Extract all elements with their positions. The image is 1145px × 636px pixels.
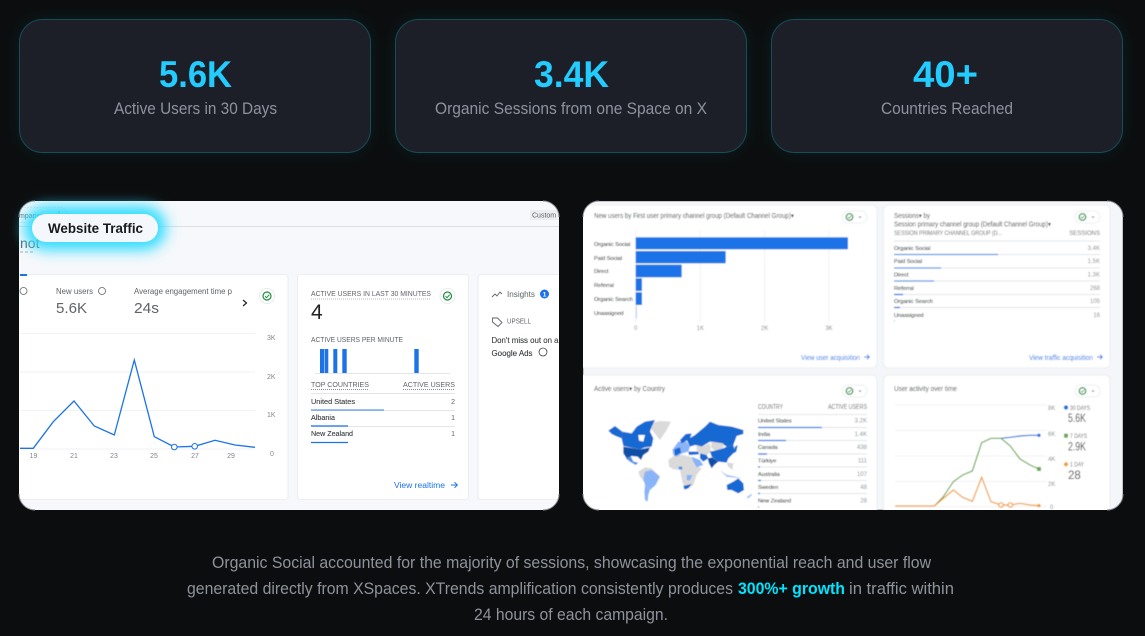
y axis labels: 1K	[267, 412, 276, 419]
legend: 30 days	[1064, 405, 1090, 425]
bar chart: channels	[636, 237, 848, 318]
panel: insights: UPSELL	[507, 318, 531, 326]
panel: insights: Insights	[507, 290, 535, 299]
table: top countries: TOP COUNTRIES	[311, 382, 369, 389]
table: top countries: United States	[311, 399, 356, 406]
icon: chevron right	[243, 300, 246, 306]
y axis labels: 2K	[1048, 482, 1055, 488]
table: top countries: ACTIVE USERS	[403, 382, 455, 389]
table: top countries: 1	[451, 431, 455, 438]
world map	[608, 420, 752, 502]
table: countries: Sweden	[758, 485, 778, 491]
panel: website traffic screenshot: not	[20, 235, 40, 251]
icon: verified check	[440, 288, 455, 304]
x axis labels: 21	[70, 453, 78, 460]
text block: summary: Organic Social accounted for the majority of sessions, showcasing the exponential reach and user flow	[212, 554, 931, 572]
panel: active users by country	[583, 374, 878, 510]
y axis labels: 8K	[1048, 406, 1055, 412]
table: countries: Canada	[758, 445, 778, 451]
table: sessions: Paid Social	[894, 259, 922, 265]
icon: verified check	[260, 288, 274, 304]
panel: insights	[478, 274, 559, 500]
x axis labels	[30, 453, 235, 458]
badge: website traffic	[24, 206, 166, 250]
table: countries: 3.2K	[855, 418, 867, 424]
panel: stat card active users	[19, 19, 371, 153]
panel: realtime users: ACTIVE USERS IN LAST 30 MINUTES	[311, 291, 431, 298]
axis labels: 1K	[697, 326, 704, 332]
table: countries: Australia	[758, 472, 781, 478]
panel: website traffic screenshot: mparison	[19, 213, 48, 220]
legend: 7 days: 7 DAYS	[1070, 434, 1087, 440]
panel: active users by country: Active users▾ by Country	[594, 386, 665, 393]
panel: stat card countries	[771, 19, 1123, 153]
table: countries: 111	[858, 458, 868, 464]
panel: new users by channel	[570, 205, 877, 368]
panel: new users by channel: New users by First user primary channel group (Default Channel Group)▾	[594, 213, 794, 220]
panel: stat card organic sessions	[395, 19, 747, 153]
x axis labels: 23	[110, 453, 118, 460]
table: countries: New Zealand	[758, 498, 791, 504]
legend: 7 days: 2.9K	[1068, 442, 1086, 454]
x axis labels: 19	[30, 453, 37, 460]
badge: insight count: 1	[543, 292, 547, 298]
bar labels	[594, 242, 633, 317]
table: sessions: 3.4K	[1088, 246, 1100, 252]
table: countries: Türkiye	[758, 458, 776, 464]
table: sessions: Organic Social	[894, 246, 930, 252]
control: check dropdown	[842, 211, 867, 223]
icon: tag	[492, 318, 502, 326]
metric: new users: New users	[56, 287, 93, 296]
panel: website traffic screenshot	[10, 201, 578, 510]
table: countries: ACTIVE USERS	[828, 404, 867, 411]
stat value: 5.6K	[159, 54, 232, 95]
bar labels: Organic Search	[594, 297, 633, 303]
panel: realtime users: ACTIVE USERS PER MINUTE	[311, 337, 403, 344]
bar chart: users per minute	[315, 349, 450, 374]
panel: users overview chart	[10, 274, 288, 500]
table: sessions: Organic Search	[894, 299, 933, 305]
panel: sessions by channel: SESSIONS	[1069, 231, 1100, 237]
axis labels: 3K	[825, 326, 833, 332]
y axis labels: 3K	[267, 335, 276, 342]
table: countries: 48	[860, 485, 868, 491]
link: view realtime	[394, 482, 458, 488]
x axis labels: 27	[191, 453, 199, 460]
table: countries: COUNTRY	[758, 404, 783, 411]
control: check dropdown	[1075, 211, 1100, 223]
panel: insights: Google Ads	[492, 349, 532, 358]
table: countries: 107	[857, 472, 868, 478]
text block: summary: in traffic within	[849, 580, 954, 598]
y axis labels: 6K	[1048, 432, 1055, 438]
legend: 1 day	[1063, 462, 1084, 482]
link: view realtime: View realtime	[394, 481, 446, 490]
metric: new users: 5.6K	[56, 300, 87, 317]
y axis labels: 0	[270, 451, 274, 458]
table: sessions: 268	[1090, 286, 1101, 292]
table: top countries: 2	[451, 399, 455, 406]
panel: sessions by channel	[884, 205, 1110, 368]
realtime value: 4	[311, 301, 323, 324]
control: check dropdown	[1075, 385, 1100, 397]
table: sessions: Direct	[894, 272, 909, 278]
legend: 1 day: 1 DAY	[1070, 462, 1084, 468]
table: sessions: 1.5K	[1088, 259, 1100, 265]
y axis labels: 4K	[1048, 457, 1055, 463]
stat value: 40+	[913, 54, 978, 95]
text block: summary	[187, 554, 954, 624]
table: countries	[758, 404, 868, 507]
panel: user activity over time	[882, 376, 1110, 510]
line chart: user activity	[895, 434, 1041, 507]
legend: 1 day: 28	[1068, 470, 1081, 482]
table: top countries: New Zealand	[311, 431, 353, 438]
stat label: Countries Reached	[881, 99, 1013, 118]
panel: sessions by channel: SESSION PRIMARY CHANNEL GROUP (D...	[894, 231, 1002, 237]
table: sessions: Unassigned	[894, 313, 924, 319]
highlight: growth figure: 300%+ growth	[738, 580, 845, 598]
stat label: Active Users in 30 Days	[114, 99, 277, 118]
badge: website traffic: Website Traffic	[48, 220, 143, 236]
legend: 7 days	[1064, 434, 1087, 454]
table: sessions: 16	[1093, 313, 1101, 319]
legend: 30 days: 30 DAYS	[1070, 406, 1090, 412]
y axis labels: 2K	[267, 374, 276, 381]
link: view traffic acquisition: View traffic acquisition	[1029, 355, 1093, 362]
panel: realtime users	[298, 274, 468, 500]
table: sessions: 1.3K	[1088, 272, 1100, 278]
bar labels: Organic Social	[594, 242, 630, 248]
panel: insights: Don't miss out on a	[492, 336, 559, 345]
metric: new users	[56, 287, 106, 313]
y axis labels	[267, 335, 276, 458]
metric: average engagement time	[134, 288, 232, 313]
panel: user activity over time: User activity over time	[894, 386, 957, 393]
table: top countries: Albania	[311, 415, 335, 422]
control: check dropdown	[842, 385, 867, 397]
table: top countries: 1	[451, 415, 455, 422]
icon: insights	[492, 292, 502, 297]
axis labels	[634, 326, 833, 332]
table: sessions: 105	[1090, 299, 1101, 305]
table: countries: 28	[860, 498, 868, 504]
text block: summary: 24 hours of each campaign.	[474, 606, 668, 624]
bar labels: Unassigned	[594, 311, 624, 317]
line chart: new users	[20, 360, 255, 450]
stat value: 3.4K	[534, 54, 609, 95]
stat label: Organic Sessions from one Space on X	[435, 99, 707, 118]
axis labels: 0	[634, 326, 638, 332]
panel: sessions by channel: Session primary channel group (Default Channel Group)▾	[894, 222, 1051, 228]
table: countries: United States	[758, 418, 792, 424]
x axis labels: 29	[227, 453, 235, 460]
badge: insight count	[540, 290, 549, 298]
x axis labels: 25	[150, 453, 158, 460]
bar labels: Direct	[594, 269, 609, 275]
y axis labels: 0	[1050, 505, 1054, 511]
table: countries: 1.4K	[855, 432, 867, 438]
link: view user acquisition: View user acquisition	[801, 355, 860, 362]
legend: 30 days: 5.6K	[1068, 413, 1086, 425]
metric: average engagement time: 24s	[134, 300, 159, 317]
axis labels: 2K	[761, 326, 768, 332]
text block: summary: generated directly from XSpaces. XTrends amplification consistently produces	[187, 580, 733, 598]
panel: analytics screenshot	[570, 201, 1123, 525]
table: sessions	[894, 241, 1101, 321]
table: countries: India	[758, 432, 771, 438]
table: top countries	[311, 382, 455, 442]
y axis labels	[1048, 406, 1055, 511]
panel: sessions by channel: Sessions▾ by	[894, 213, 930, 220]
bar labels: Paid Social	[594, 256, 622, 262]
bar labels: Referral	[594, 283, 614, 289]
table: sessions: Referral	[894, 286, 914, 292]
metric: average engagement time: Average engagement time p	[134, 287, 233, 296]
panel: website traffic screenshot: Custom	[532, 212, 556, 220]
table: countries: 438	[857, 445, 868, 451]
